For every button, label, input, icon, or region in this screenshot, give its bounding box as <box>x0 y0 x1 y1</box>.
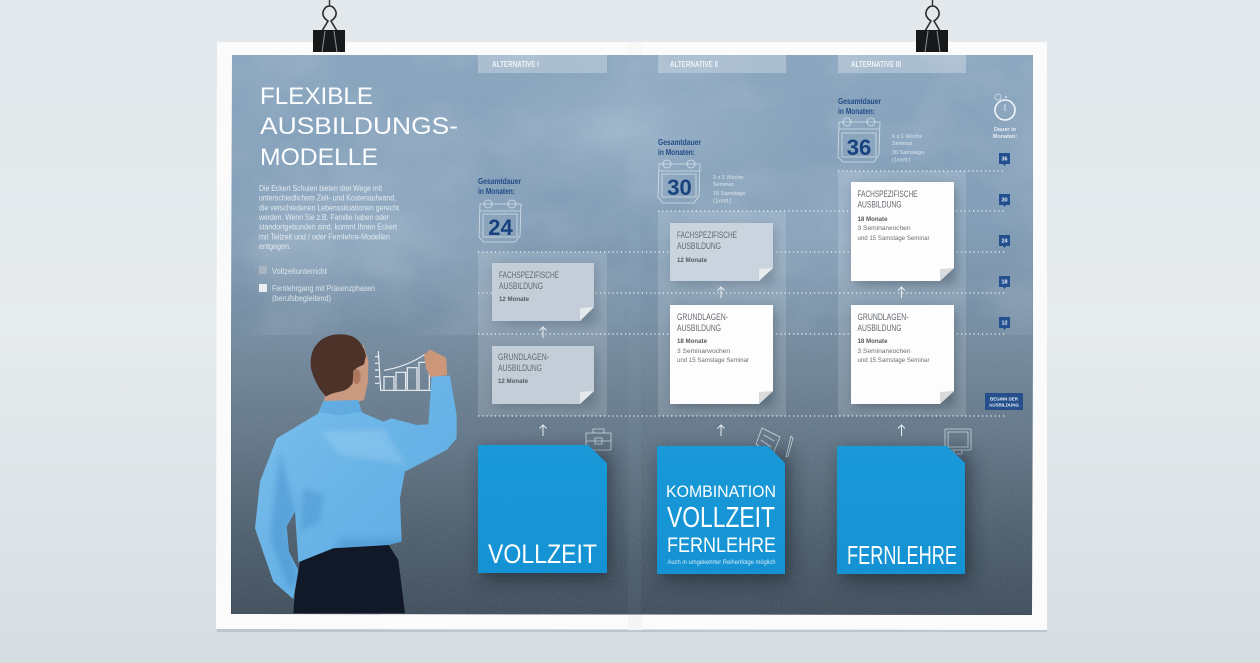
duration scale label: Dauer in <box>994 127 1017 133</box>
intro text: mit Teilzeit und / oder Fernlehre-Modellen <box>259 232 390 242</box>
duration scale label <box>993 127 1017 140</box>
chalkboard background <box>200 55 1033 615</box>
trousers <box>293 544 405 613</box>
total duration column I: in Monaten: <box>478 186 515 196</box>
blue block: Kombination <box>657 446 790 581</box>
legend: (berufsbegleitend) <box>272 294 331 303</box>
shirt <box>255 376 457 599</box>
duration tags: 36 <box>1001 156 1008 162</box>
card: column III specialist: 3 Seminarwochen <box>858 225 911 232</box>
start of training tag <box>985 393 1023 410</box>
title: FLEXIBLE <box>260 83 373 110</box>
duration tags: 18 <box>1001 280 1008 286</box>
seminar note column II: 3 x 1 Woche <box>713 175 743 181</box>
poster sheet <box>216 42 1047 632</box>
start of training tag: AUSBILDUNG <box>989 402 1019 408</box>
blue block: Kombination: FERNLEHRE <box>667 534 776 557</box>
seminar note column II <box>713 175 745 204</box>
seminar note column III: 6 x 1 Woche <box>892 134 922 140</box>
start of training tag: BEGINN DER <box>990 396 1019 402</box>
title <box>260 83 458 171</box>
card: column III specialist: und 15 Samstage Seminar <box>858 235 930 242</box>
progress arrows <box>540 287 905 436</box>
card: column II foundation: AUSBILDUNG <box>677 323 721 333</box>
legend <box>259 266 375 303</box>
card: column II foundation: 3 Seminarwochen <box>677 348 730 355</box>
duration scale label: Monaten: <box>993 134 1017 140</box>
card: column III foundation <box>851 305 955 407</box>
duration tags: 12 <box>1001 320 1008 326</box>
seminar note column III: Seminar <box>892 141 913 147</box>
duration tags: 24 <box>1001 238 1008 244</box>
intro text: unterschiedlichem Zeit- und Kostenaufwand, <box>259 194 396 202</box>
card: column II foundation: und 15 Samstage Seminar <box>677 357 750 364</box>
card: column I specialist: FACHSPEZIFISCHE <box>499 270 559 280</box>
total duration column III <box>838 96 924 164</box>
blue block: Vollzeit <box>478 445 611 580</box>
icon: stopwatch <box>995 94 1015 120</box>
column header bars: ALTERNATIVE II <box>670 60 718 69</box>
intro text: Die Eckert Schulen bieten drei Wege mit <box>259 184 383 193</box>
legend: Vollzeitunterricht <box>272 267 328 276</box>
card: column II foundation: GRUNDLAGEN- <box>677 312 728 322</box>
seminar note column II: 15 Samstage <box>713 191 745 197</box>
card: column III specialist: 18 Monate <box>858 216 888 223</box>
blue block: Kombination: VOLLZEIT <box>667 502 775 534</box>
card: column II specialist: FACHSPEZIFISCHE <box>677 230 737 240</box>
total duration column III: Gesamtdauer <box>838 96 882 106</box>
card: column II foundation <box>670 305 774 407</box>
card: column III specialist: FACHSPEZIFISCHE <box>858 189 918 199</box>
blue block: Kombination: Auch in umgekehrter Reihenfolge möglich <box>668 559 776 566</box>
blue block: Fernlehre: FERNLEHRE <box>847 540 957 570</box>
card: column I specialist <box>492 263 596 324</box>
total duration column III: in Monaten: <box>838 106 875 116</box>
seminar note column II: Seminar <box>713 182 734 188</box>
card: column I foundation <box>492 346 596 407</box>
person drawing chart on the board <box>255 334 457 613</box>
total duration column II <box>658 137 745 204</box>
card: column III specialist <box>851 182 955 284</box>
dotted duration grid <box>478 171 1005 416</box>
card: column II specialist <box>670 223 774 284</box>
total duration column II: Gesamtdauer <box>658 137 702 147</box>
seminar note column III <box>892 134 924 164</box>
card: column I specialist: 12 Monate <box>499 296 529 303</box>
column bands <box>478 171 966 416</box>
card: column I foundation: 12 Monate <box>498 378 528 385</box>
title: AUSBILDUNGS- <box>260 113 458 140</box>
intro text: standortgebunden sind, kommt Ihnen Eckert <box>259 222 398 232</box>
shirt shading <box>270 400 407 592</box>
intro text: werden. Wenn Sie z.B. Familie haben oder <box>258 213 389 222</box>
blue block: Kombination: KOMBINATION <box>666 482 776 501</box>
icon: calendar 30: 30 <box>667 175 692 200</box>
card: column III foundation: GRUNDLAGEN- <box>858 312 908 322</box>
binder clip left <box>313 0 345 52</box>
column header bars: ALTERNATIVE III <box>851 60 901 69</box>
seminar note column II: (1xmtl.) <box>713 198 732 204</box>
total duration column I: Gesamtdauer <box>478 176 522 186</box>
total duration column I <box>478 176 522 242</box>
card: column III foundation: AUSBILDUNG <box>858 323 902 333</box>
icon: monitor <box>945 429 971 454</box>
hair <box>311 334 366 397</box>
skin: head, neck and hand <box>320 345 447 402</box>
blue block: Vollzeit: VOLLZEIT <box>488 539 597 569</box>
seminar note column III: (1xmtl.) <box>892 158 910 164</box>
icon: calendar 36: 36 <box>847 135 871 160</box>
card: column II foundation: 18 Monate <box>677 338 707 345</box>
icon: briefcase <box>586 429 611 450</box>
card: column III specialist: AUSBILDUNG <box>858 200 902 210</box>
legend: Fernlehrgang mit Präsenzphasen <box>272 284 375 293</box>
column header bars <box>478 55 966 73</box>
icon: calendar 24: 24 <box>488 215 513 240</box>
card: column III foundation: 18 Monate <box>858 338 888 345</box>
blue block: Fernlehre <box>837 446 970 581</box>
card: column I specialist: AUSBILDUNG <box>499 281 543 291</box>
intro text: entgegen. <box>259 242 291 251</box>
card: column I foundation: GRUNDLAGEN- <box>498 352 549 362</box>
card: column III foundation: 3 Seminarwochen <box>858 348 911 355</box>
chalk bar chart <box>375 351 432 390</box>
duration tags: 30 <box>1001 198 1008 204</box>
seminar note column III: 30 Samstage <box>892 150 924 156</box>
duration tags <box>999 153 1010 330</box>
title: MODELLE <box>260 144 378 171</box>
card: column II specialist: AUSBILDUNG <box>677 241 721 251</box>
icon: clipboard and pen <box>756 428 793 457</box>
card: column I foundation: AUSBILDUNG <box>498 363 542 373</box>
card: column II specialist: 12 Monate <box>677 257 707 264</box>
total duration column II: in Monaten: <box>658 147 695 157</box>
binder clip right <box>916 0 948 52</box>
card: column III foundation: und 15 Samstage Seminar <box>858 357 930 364</box>
column header bars: ALTERNATIVE I <box>492 60 539 69</box>
intro text: die verschiedenen Lebenssituationen gerecht <box>259 204 400 212</box>
intro text <box>258 184 400 251</box>
